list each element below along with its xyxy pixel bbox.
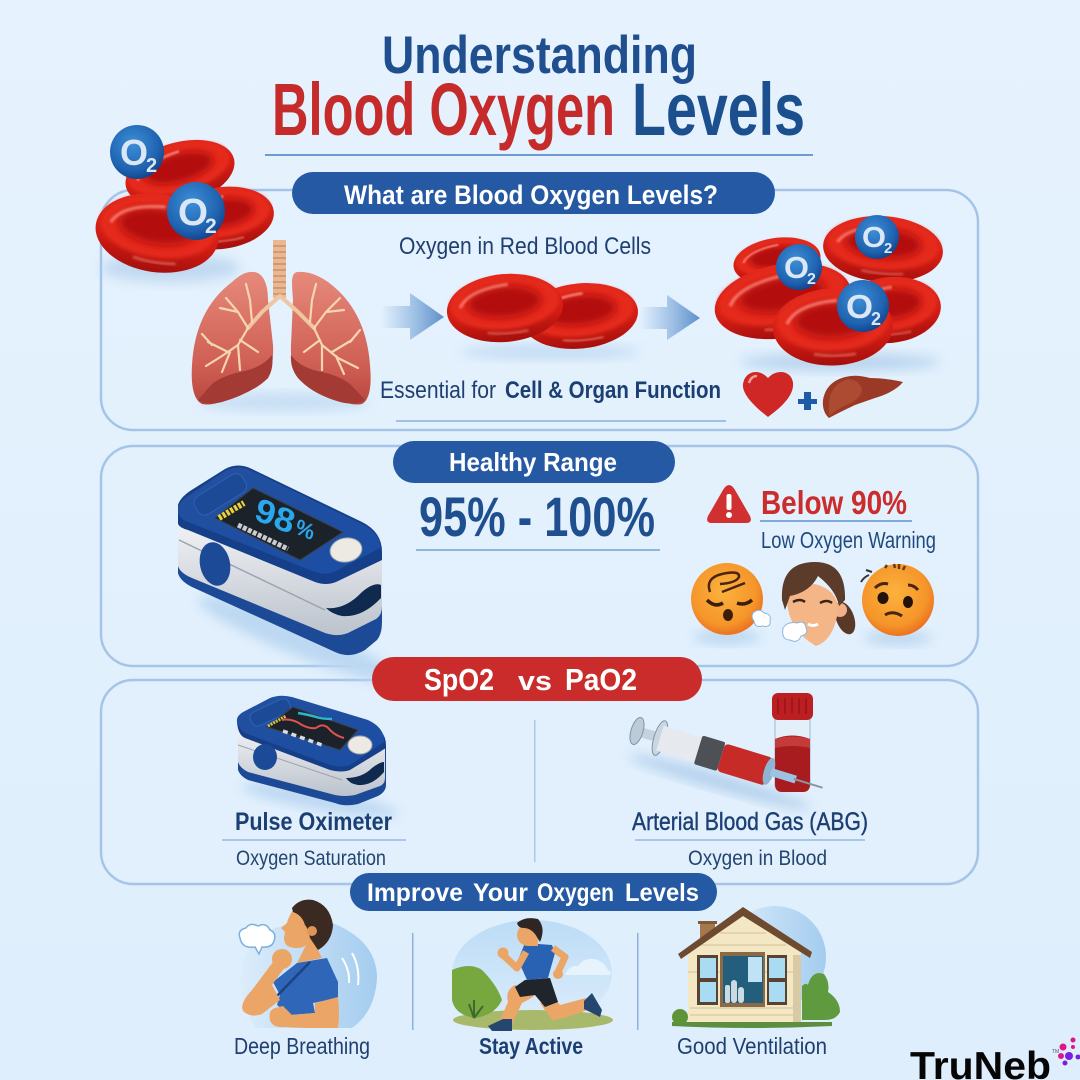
icon: runner bbox=[452, 918, 613, 1031]
arrow: lungs to red blood cells bbox=[381, 293, 444, 340]
text: pulse oximeter label: Oxygen Saturation bbox=[236, 847, 386, 870]
title: Understanding bbox=[382, 26, 697, 85]
icon: oxygenated red blood cells cluster bbox=[709, 212, 945, 371]
icon: warning triangle bbox=[707, 485, 751, 523]
text: arterial blood gas label: Arterial Blood Gas (ABG) bbox=[632, 808, 868, 836]
text: good ventilation: Good Ventilation bbox=[677, 1033, 827, 1059]
logo: TruNeb bbox=[910, 1038, 1080, 1080]
icon: oxygenated red blood cells cluster: 2 bbox=[807, 271, 816, 288]
arrow: red blood cells to oxygenated cells bbox=[640, 295, 700, 340]
text: deep breathing: Deep Breathing bbox=[234, 1033, 370, 1059]
icon: oxygenated red blood cells cluster: O bbox=[862, 222, 886, 254]
heading pill: SpO2 vs PaO2: PaO2 bbox=[565, 662, 637, 697]
heading pill: SpO2 vs PaO2: vs bbox=[518, 666, 552, 696]
divider: improve section bbox=[412, 933, 414, 1030]
heading pill: improve your oxygen levels: Oxygen bbox=[537, 879, 614, 907]
icon: pulse oximeter showing 98 percent: 98 bbox=[251, 490, 299, 541]
divider: improve section bbox=[637, 933, 638, 1030]
heading pill: healthy range bbox=[393, 441, 675, 483]
panel: SpO2 vs PaO2 bbox=[101, 680, 978, 884]
panel: what are blood oxygen levels bbox=[101, 190, 978, 430]
icon: plus bbox=[798, 392, 817, 410]
icon: worried face bbox=[861, 564, 934, 645]
panel: healthy range bbox=[101, 446, 978, 666]
text: pulse oximeter label: Pulse Oximeter bbox=[235, 808, 392, 836]
heading pill: SpO2 vs PaO2 bbox=[372, 657, 702, 701]
text: essential for cell and organ function bbox=[380, 377, 726, 422]
icon: small pulse oximeter bbox=[237, 696, 401, 824]
icon: red blood cells with oxygen, top left: O bbox=[178, 192, 208, 234]
heading pill: SpO2 vs PaO2: SpO2 bbox=[424, 662, 494, 697]
text: essential for cell and organ function: Cell & Organ Function bbox=[505, 377, 721, 404]
divider: SpO2 vs PaO2 bbox=[534, 720, 536, 862]
icon: pulse oximeter showing 98 percent: % bbox=[293, 514, 318, 545]
text: arterial blood gas label bbox=[632, 808, 868, 870]
icon: woman short of breath bbox=[782, 562, 859, 646]
icon: red blood cells with oxygen, top left: O bbox=[120, 132, 148, 173]
icon: oxygenated red blood cells cluster: 2 bbox=[884, 240, 892, 257]
text: pulse oximeter label bbox=[222, 808, 406, 870]
icon: heart bbox=[743, 372, 793, 417]
icon: oxygenated red blood cells cluster: 2 bbox=[871, 309, 881, 329]
icon: house with good ventilation bbox=[672, 906, 840, 1028]
text: stay active: Stay Active bbox=[479, 1033, 583, 1059]
icon: oxygenated red blood cells cluster: O bbox=[784, 250, 809, 285]
text: healthy range value: 95% - 100% bbox=[419, 485, 655, 548]
text: below 90 percent warning: Low Oxygen Warning bbox=[761, 527, 936, 553]
icon: deep breathing person bbox=[239, 900, 377, 1028]
icon: red blood cells with oxygen, top left bbox=[90, 125, 278, 282]
text: essential for cell and organ function: Essential for bbox=[380, 377, 496, 404]
icon: pulse oximeter showing 98 percent bbox=[178, 466, 408, 696]
icon: syringe and blood vial bbox=[626, 693, 828, 816]
heading pill: improve your oxygen levels: Improve bbox=[367, 879, 463, 907]
title: Levels bbox=[632, 68, 805, 151]
heading pill: what are blood oxygen levels bbox=[292, 172, 775, 214]
icon: red blood cells with oxygen, top left: 2 bbox=[146, 155, 157, 177]
heading pill: healthy range: Healthy Range bbox=[449, 447, 617, 477]
logo: TruNeb: TM bbox=[1052, 1049, 1059, 1055]
heading pill: improve your oxygen levels: Levels bbox=[625, 879, 699, 907]
title: Blood Oxygen bbox=[272, 68, 615, 151]
heading pill: improve your oxygen levels bbox=[350, 873, 717, 911]
heading pill: improve your oxygen levels: Your bbox=[473, 879, 528, 907]
icon: two red blood cells bbox=[444, 269, 641, 359]
icon: red blood cells with oxygen, top left: 2 bbox=[205, 215, 217, 238]
icon: dizzy face bbox=[691, 563, 770, 644]
text: arterial blood gas label: Oxygen in Blood bbox=[688, 847, 827, 870]
text: below 90 percent warning: Below 90% bbox=[761, 484, 907, 521]
icon: oxygenated red blood cells cluster: O bbox=[846, 288, 873, 325]
icon: lungs bbox=[192, 240, 371, 411]
icon: liver bbox=[823, 376, 903, 418]
heading pill: what are blood oxygen levels: What are Blood Oxygen Levels? bbox=[344, 180, 718, 210]
text: below 90 percent warning bbox=[760, 484, 936, 553]
title bbox=[265, 26, 813, 156]
text: oxygen in red blood cells: Oxygen in Red Blood Cells bbox=[399, 233, 651, 260]
